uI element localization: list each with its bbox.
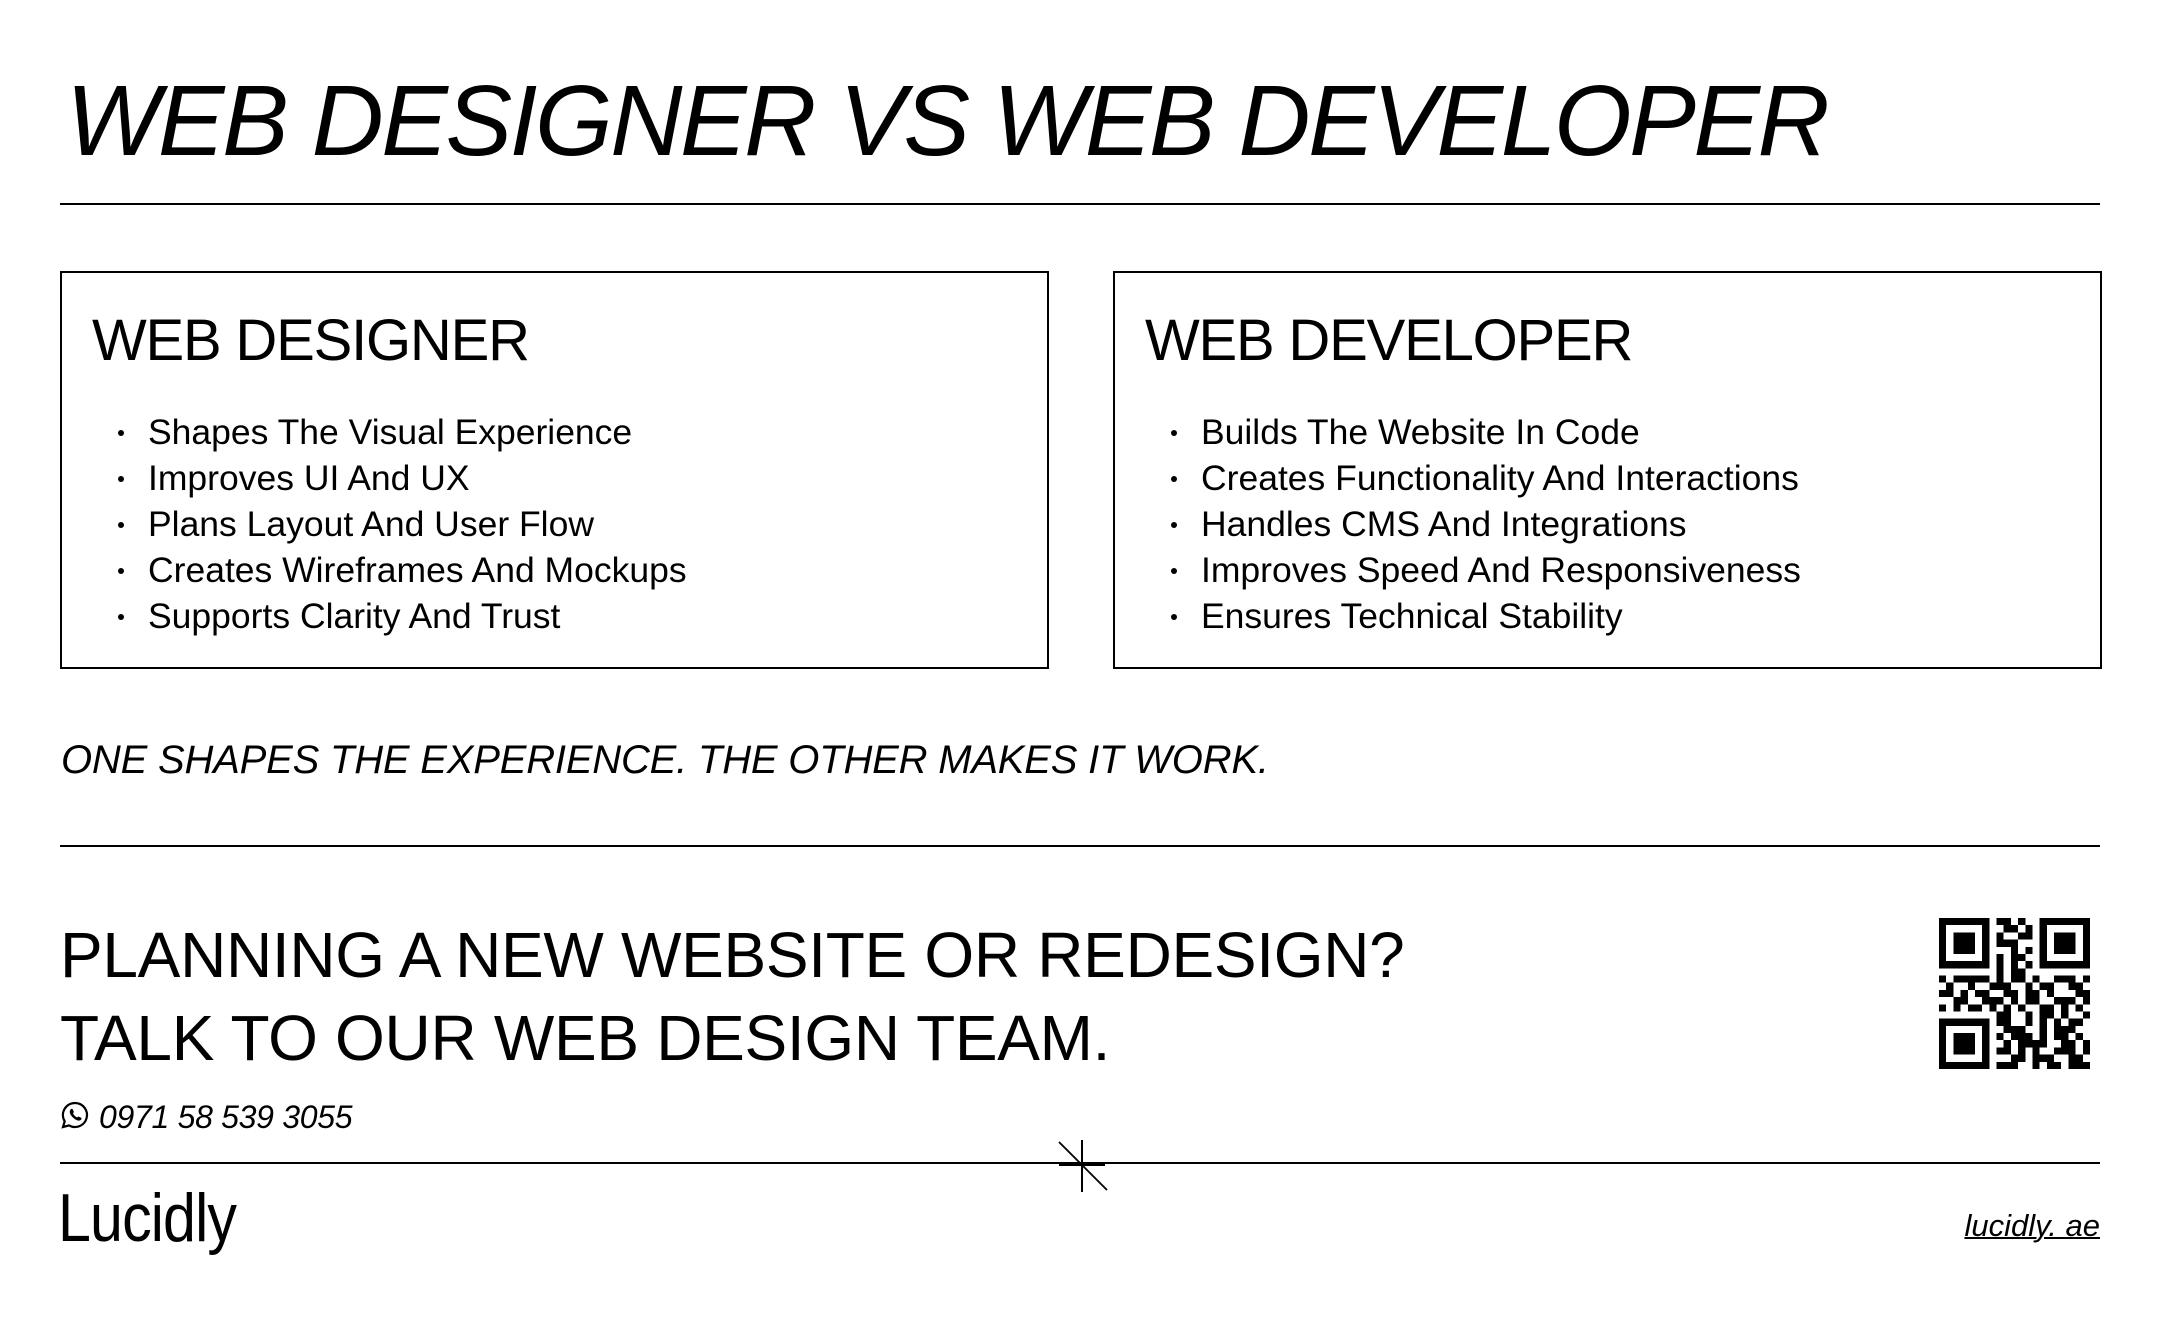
list: developer tasks: Builds The Website In Code (1201, 412, 1640, 452)
list: developer tasks (1171, 412, 1801, 636)
logo: lucidly: Lucidly (58, 1180, 236, 1256)
icon: whatsapp (61, 1102, 88, 1129)
list: developer tasks: Ensures Technical Stability (1201, 596, 1623, 636)
list: designer tasks: Shapes The Visual Experience (148, 412, 632, 452)
list: designer tasks: Plans Layout And User Flow (148, 504, 594, 544)
title: WEB DESIGNER VS WEB DEVELOPER (66, 65, 1827, 177)
icon: cursor star (1058, 1140, 1108, 1192)
list: developer tasks: Improves Speed And Responsiveness (1201, 550, 1801, 590)
call to action heading: PLANNING A NEW WEBSITE OR REDESIGN? (60, 919, 1404, 991)
heading: web designer: WEB DESIGNER (92, 308, 529, 373)
list: designer tasks: Creates Wireframes And Mockups (148, 550, 687, 590)
list: designer tasks: Improves UI And UX (148, 458, 470, 498)
panel: web designer (60, 271, 1049, 669)
qr code (1939, 918, 2090, 1069)
website link: lucidly. ae (1964, 1208, 2100, 1243)
list: designer tasks (118, 412, 687, 636)
list: designer tasks: Supports Clarity And Trust (148, 596, 560, 636)
heading: web developer: WEB DEVELOPER (1145, 308, 1632, 373)
tagline: ONE SHAPES THE EXPERIENCE. THE OTHER MAKES IT WORK. (61, 738, 1269, 782)
phone contact: 0971 58 539 3055 (99, 1099, 352, 1135)
call to action heading (60, 919, 1404, 1074)
call to action heading: TALK TO OUR WEB DESIGN TEAM. (60, 1002, 1110, 1074)
list: developer tasks: Handles CMS And Integrations (1201, 504, 1686, 544)
panel: web developer (1113, 271, 2102, 669)
list: developer tasks: Creates Functionality And Interactions (1201, 458, 1799, 498)
